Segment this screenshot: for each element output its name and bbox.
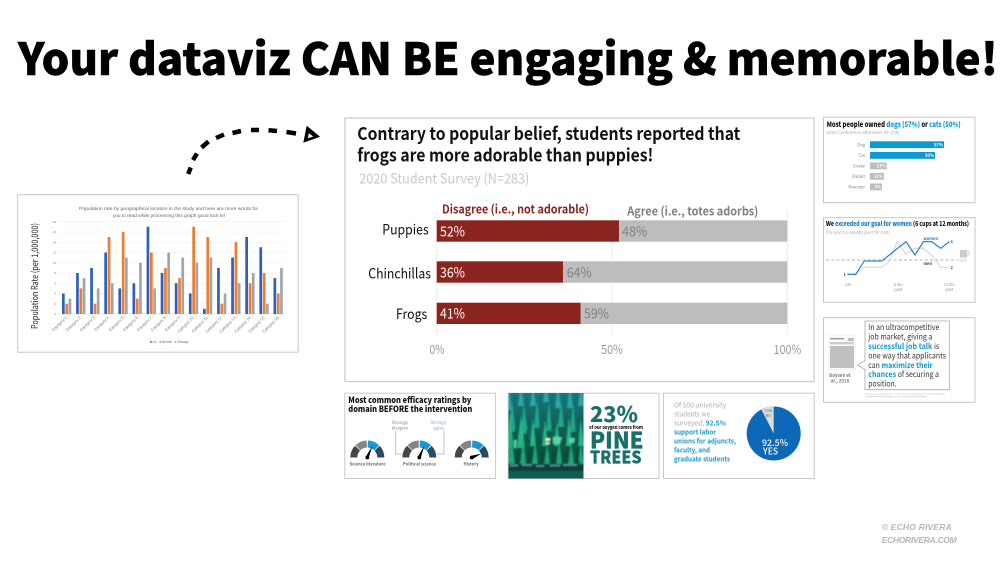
category labels — [51, 315, 280, 334]
x axis labels — [430, 339, 802, 358]
pie chart: YES — [762, 444, 778, 458]
legend: Chicago — [177, 340, 189, 344]
row: chinchillas: 64% — [567, 262, 592, 282]
pet subtitle: 2020 Conference attendees (N=230) — [827, 130, 900, 136]
icon: goal cup: GOAL — [958, 258, 968, 264]
gauge labels: History — [464, 461, 479, 468]
gauge labels: Science literature — [350, 461, 386, 468]
panel: efficacy gauges — [345, 393, 496, 478]
pet bars: 11% — [874, 174, 883, 180]
citation label: al., 2018 — [831, 378, 850, 384]
survey text: Of 500 university — [674, 400, 727, 410]
pet bars — [848, 141, 944, 190]
category labels: Category 14 — [233, 315, 252, 334]
watermark — [882, 522, 958, 545]
x axis labels: 0% — [430, 339, 445, 358]
category labels: Category 12 — [204, 315, 223, 334]
gauge: science literature — [354, 444, 381, 459]
icon: journal article thumbnail — [828, 336, 856, 370]
watermark: ECHORIVERA.COM — [882, 535, 958, 545]
y axis title: Population Rate (per 1,000,000) — [28, 223, 41, 329]
reference text — [865, 392, 945, 398]
gridlines and y labels: 8 — [54, 271, 56, 275]
citation label — [829, 373, 851, 384]
pet bars: 50% — [925, 153, 934, 159]
panel: pet ownership bars — [824, 117, 975, 203]
survey text: surveyed, 92.5% — [674, 418, 727, 428]
bubble text: chances of securing a — [868, 369, 939, 380]
efficacy heading — [348, 394, 472, 415]
survey text: graduate students — [674, 454, 731, 464]
trees label: TREES — [590, 443, 642, 468]
bubble text: In an ultracompetitive — [868, 322, 940, 333]
big number: 23% — [590, 398, 638, 429]
scale labels — [392, 420, 448, 454]
line: women — [847, 242, 949, 274]
x labels — [845, 283, 955, 293]
chart title — [79, 206, 259, 219]
category labels: Category 2 — [65, 315, 82, 332]
goal line — [826, 259, 957, 261]
row: frogs: 59% — [584, 304, 609, 324]
gridlines and y labels: 0 — [54, 312, 56, 316]
panel: cluttered bar chart — [18, 195, 298, 352]
survey text: unions for adjuncts, — [674, 436, 736, 446]
line labels: men — [923, 261, 933, 267]
gridlines and y labels: 4 — [54, 292, 56, 296]
bubble text: one way that applicants — [868, 350, 946, 361]
gauge: history — [458, 444, 485, 459]
category labels: Category 1 — [51, 315, 68, 332]
gridlines — [437, 210, 787, 335]
legend: disagree: Disagree (i.e., not adorable) — [442, 200, 589, 217]
category labels: Category 9 — [164, 315, 181, 332]
title: Your dataviz CAN BE engaging & memorable! — [17, 24, 998, 88]
line labels: 2 — [950, 265, 954, 271]
bubble text — [867, 322, 946, 390]
x axis labels: 50% — [601, 339, 623, 358]
legend — [150, 340, 189, 344]
pie chart: NO — [766, 414, 771, 419]
gauge labels — [350, 461, 479, 468]
category labels: Category 6 — [122, 315, 139, 332]
panel: goal line chart — [824, 218, 975, 302]
x axis labels: 100% — [774, 339, 802, 358]
pet bars: Hamster — [848, 184, 865, 190]
gridlines and y labels — [53, 220, 285, 316]
line chart subtitle: Pre and 12-month post (N=326) — [826, 230, 891, 236]
category labels: Category 3 — [79, 315, 96, 332]
gridlines and y labels: 2 — [54, 302, 56, 306]
row: puppies: 48% — [622, 221, 647, 241]
arrow: dashed curve to main chart — [188, 126, 320, 174]
pet bars: 13% — [877, 164, 886, 170]
bubble text: can maximize their — [868, 360, 933, 371]
image: forest over lake — [508, 393, 584, 478]
row: puppies: Puppies — [382, 220, 429, 240]
category labels: Category 13 — [218, 315, 237, 334]
line labels — [844, 236, 954, 278]
chart heading: frogs are more adorable than puppies! — [357, 143, 653, 168]
gridlines and y labels: 14 — [53, 240, 56, 244]
efficacy heading: Most common efficacy ratings by — [348, 394, 471, 406]
pet bars: Cat — [858, 153, 865, 159]
category labels: Category 10 — [176, 315, 195, 334]
reference text: Perceptions of psychology faculty. Teaching of Psychology — [865, 395, 927, 398]
legend: LA — [152, 340, 157, 344]
gridlines and y labels: 6 — [54, 282, 56, 286]
pie chart: 92.5% — [762, 436, 789, 449]
pet bars: Dog — [857, 142, 866, 148]
chart title: you to read while processing this graph good luck lol — [113, 213, 225, 219]
bars: LA, Denver, Chicago — [62, 227, 283, 314]
category labels: Category 5 — [108, 315, 125, 332]
survey text: students we — [674, 408, 710, 418]
gridlines and y labels: 12 — [53, 251, 56, 255]
panel: pine trees statistic — [506, 384, 659, 479]
category labels: Category 8 — [150, 315, 167, 332]
survey text: support labor — [674, 426, 716, 436]
x labels: 6 mo — [894, 283, 903, 288]
pine label: PINE — [590, 423, 644, 456]
category labels: Category 11 — [190, 315, 209, 333]
category labels: Category 16 — [261, 315, 280, 334]
icon: goal cup — [958, 250, 969, 264]
watermark: © ECHO RIVERA — [882, 522, 952, 532]
row: puppies: 52% — [440, 221, 465, 241]
citation label: Boysen et — [829, 373, 851, 379]
stat caption: of our oxygen comes from — [589, 424, 644, 431]
panel: citation callout — [824, 318, 975, 402]
line labels: women — [923, 236, 938, 242]
speech bubble — [858, 321, 949, 390]
legend: agree: Agree (i.e., totes adorbs) — [626, 203, 758, 220]
chart heading — [357, 121, 741, 168]
pie chart: 7.5% — [764, 409, 773, 414]
chart title: Population rate by geographical location in the study and here are more words for — [79, 206, 259, 212]
pet heading: Most people owned dogs (57%) or cats (50%) — [827, 119, 961, 130]
bubble text: position. — [868, 378, 897, 390]
line labels: 6 — [950, 239, 954, 245]
gauge labels: Political science — [403, 461, 436, 468]
line: men — [847, 242, 949, 274]
x labels: post — [894, 287, 903, 293]
reference text: Boysen, G. A., Chicosky, R. L., Delmore, E. E. Evaluating the success of job talks — [865, 392, 945, 395]
survey text — [674, 400, 736, 464]
category labels: Category 15 — [247, 315, 266, 334]
panel: labor union pie — [664, 393, 814, 478]
gridlines and y labels: 10 — [53, 261, 56, 265]
scale labels: Strongly — [392, 420, 409, 426]
pet bars: 57% — [934, 142, 943, 148]
row: chinchillas: 36% — [440, 262, 465, 282]
legend: Denver — [162, 340, 173, 344]
efficacy heading: domain BEFORE the intervention — [348, 403, 472, 415]
scale labels: agree — [433, 426, 445, 432]
scale labels: Strongly — [431, 420, 448, 426]
category labels: Category 7 — [136, 315, 153, 332]
chart heading: Contrary to popular belief, students reported that — [357, 121, 741, 146]
pet bars: 9% — [874, 184, 881, 190]
line chart heading: We exceeded our goal for women (6 cups at 12 months) — [826, 219, 969, 228]
x labels: 12 mo — [944, 283, 955, 288]
x labels: post — [945, 287, 954, 293]
row: chinchillas — [368, 261, 787, 283]
row: frogs — [396, 303, 787, 324]
panel: main stacked bar chart — [345, 118, 814, 382]
category labels: Category 4 — [93, 315, 110, 332]
pie chart — [747, 406, 801, 460]
bubble text: job market, giving a — [867, 332, 932, 342]
row: chinchillas: Chinchillas — [368, 263, 431, 283]
scale labels: disagree — [392, 426, 409, 432]
survey text: faculty, and — [674, 444, 710, 454]
row: frogs: Frogs — [396, 304, 428, 324]
row: puppies — [382, 220, 787, 242]
gridlines and y labels: 16 — [53, 230, 56, 234]
gridlines and y labels: 18 — [53, 220, 56, 224]
bubble text: successful job talk is — [868, 341, 940, 352]
gauge: political science — [406, 444, 433, 459]
subtitle: 2020 Student Survey (N=283) — [359, 168, 529, 188]
row: frogs: 41% — [440, 304, 465, 324]
line labels: 1 — [844, 272, 846, 278]
pet bars: Snake — [853, 162, 866, 170]
x labels: pre — [845, 283, 851, 288]
pet bars: Rabbit — [852, 174, 865, 180]
